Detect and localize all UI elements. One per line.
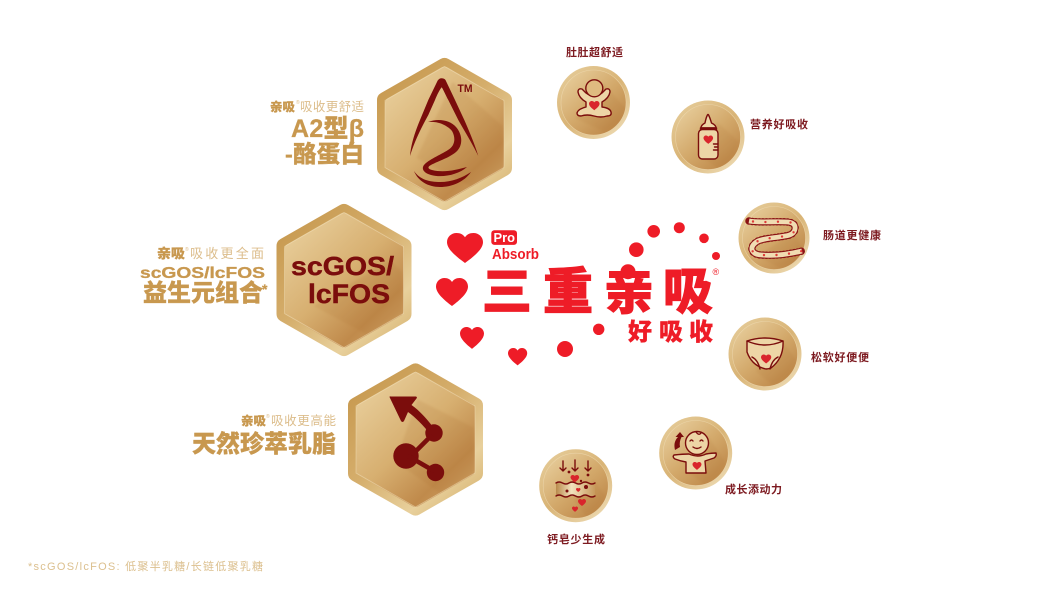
text block: scGOS/lcFOS prebiotic: * <box>262 281 268 297</box>
icon: happy baby <box>673 432 716 473</box>
text block: scGOS/lcFOS prebiotic: 亲吸 <box>157 246 185 261</box>
benefit: soft stool: 松软好便便 <box>811 350 869 364</box>
text block: scGOS/lcFOS prebiotic: 益生元组合 <box>143 279 263 307</box>
benefit: soft stool <box>728 318 869 390</box>
icon: diaper <box>747 338 783 369</box>
icon: intestinal wall <box>556 460 595 512</box>
text block: A2 beta-casein: ® <box>296 99 300 106</box>
logo: ProAbsorb: Pro <box>494 231 515 245</box>
benefit: gut health <box>738 202 881 274</box>
text block: A2 beta-casein: 吸收更舒适 <box>300 100 364 114</box>
icon: A2 drop logo <box>410 78 478 187</box>
benefit: less calcium soap <box>539 449 612 546</box>
text block: A2 beta-casein: -酪蛋白 <box>285 141 364 167</box>
icon: scGOS/lcFOS text: lcFOS <box>308 279 390 309</box>
text block: scGOS/lcFOS prebiotic: ® <box>185 246 189 253</box>
logo: ProAbsorb <box>491 230 539 263</box>
hearts and dots arc <box>436 222 720 365</box>
title: 三重亲吸: 重 <box>543 264 593 320</box>
icon: intestine <box>749 221 802 255</box>
text block: natural milk fat: 天然珍萃乳脂 <box>192 430 336 458</box>
icon: A2 drop logo: TM <box>458 83 472 95</box>
text block: scGOS/lcFOS prebiotic <box>140 246 268 307</box>
logo: ProAbsorb: Absorb <box>492 246 539 263</box>
title: 三重亲吸 <box>482 264 720 320</box>
benefit: growth energy <box>659 416 782 496</box>
subtitle: 好吸收: 吸 <box>659 319 683 346</box>
benefit: nutrition absorption <box>672 100 808 174</box>
icon: molecule arrow <box>390 396 444 481</box>
text block: A2 beta-casein: A2型β <box>291 115 364 143</box>
title: 三重亲吸: ® <box>712 267 720 277</box>
text block: natural milk fat: 吸收更高能 <box>271 413 336 428</box>
icon: baby bottle <box>698 114 718 159</box>
benefit: tummy comfort <box>557 45 630 139</box>
hexagon badge: A2 protein <box>385 66 504 202</box>
title: 三重亲吸: 三 <box>482 264 532 320</box>
subtitle: 好吸收: 收 <box>689 319 713 346</box>
text block: natural milk fat <box>192 413 336 458</box>
benefit: tummy comfort: 肚肚超舒适 <box>566 45 623 59</box>
text block: A2 beta-casein <box>270 99 364 167</box>
text block: scGOS/lcFOS prebiotic: 吸收更全面 <box>190 246 264 261</box>
benefit: growth energy: 成长添动力 <box>725 482 782 496</box>
icon: baby <box>577 80 611 117</box>
text block: natural milk fat: 亲吸 <box>241 413 266 428</box>
text block: A2 beta-casein: 亲吸 <box>270 99 295 114</box>
icon: scGOS/lcFOS text: scGOS/ <box>291 251 394 281</box>
text block: scGOS/lcFOS prebiotic: scGOS/lcFOS <box>140 265 265 282</box>
subtitle: 好吸收: 好 <box>628 319 652 346</box>
icon: scGOS/lcFOS text <box>291 251 394 309</box>
title: 三重亲吸: 吸 <box>663 264 713 320</box>
hexagon badge: natural milk fat <box>356 372 475 508</box>
subtitle: 好吸收 <box>628 319 713 346</box>
footnote: *scGOS/lcFOS: 低聚半乳糖/长链低聚乳糖 <box>28 559 263 573</box>
benefit: nutrition absorption: 营养好吸收 <box>750 117 808 131</box>
text block: natural milk fat: ® <box>266 413 270 420</box>
benefit: gut health: 肠道更健康 <box>823 228 881 242</box>
title: 三重亲吸: 亲 <box>604 264 654 320</box>
benefit: less calcium soap: 钙皂少生成 <box>547 532 605 546</box>
hexagon badge: scGOS/lcFOS <box>284 212 404 348</box>
